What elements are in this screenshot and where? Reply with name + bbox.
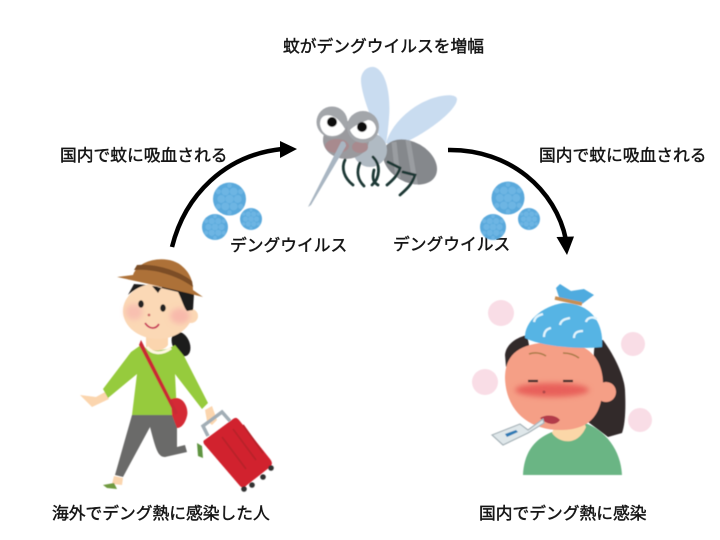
right hand <box>205 406 217 425</box>
sweater <box>103 345 208 415</box>
icon: sick person <box>472 284 652 475</box>
caption: infected person: 国内でデング熱に感染 <box>479 503 647 523</box>
thermometer <box>492 419 544 445</box>
hair <box>505 335 625 437</box>
shirt <box>523 423 622 475</box>
icon: viruses left <box>202 182 262 240</box>
hair <box>128 284 194 311</box>
face <box>505 342 603 430</box>
collar <box>552 418 586 441</box>
label: dengue virus left: デングウイルス <box>230 235 347 255</box>
label: bitten right: 国内で蚊に吸血される <box>539 146 707 165</box>
title: mosquito amplifies virus: 蚊がデングウイルスを増幅 <box>283 36 484 56</box>
label: bitten left: 国内で蚊に吸血される <box>60 146 228 165</box>
rear shoe <box>197 443 203 458</box>
suitcase <box>203 418 272 487</box>
arrow: traveller to mosquito <box>172 141 297 247</box>
hat <box>117 259 203 297</box>
icon: traveller with suitcase <box>80 259 274 492</box>
ice bag <box>525 303 602 348</box>
front foot <box>112 476 123 485</box>
arrow: mosquito to patient <box>448 150 574 255</box>
ponytail <box>168 329 194 359</box>
left hand <box>80 392 109 407</box>
ear <box>596 382 616 402</box>
label: dengue virus right: デングウイルス <box>393 234 510 254</box>
icon: mosquito <box>308 67 457 207</box>
pants <box>115 415 187 477</box>
suitcase handle <box>203 412 230 436</box>
icon: viruses right <box>480 182 540 240</box>
ear <box>184 309 198 323</box>
bag <box>171 398 187 428</box>
face <box>123 283 193 339</box>
steam puffs <box>488 300 514 326</box>
neck <box>146 333 168 351</box>
caption: traveller: 海外でデング熱に感染した人 <box>52 503 270 523</box>
